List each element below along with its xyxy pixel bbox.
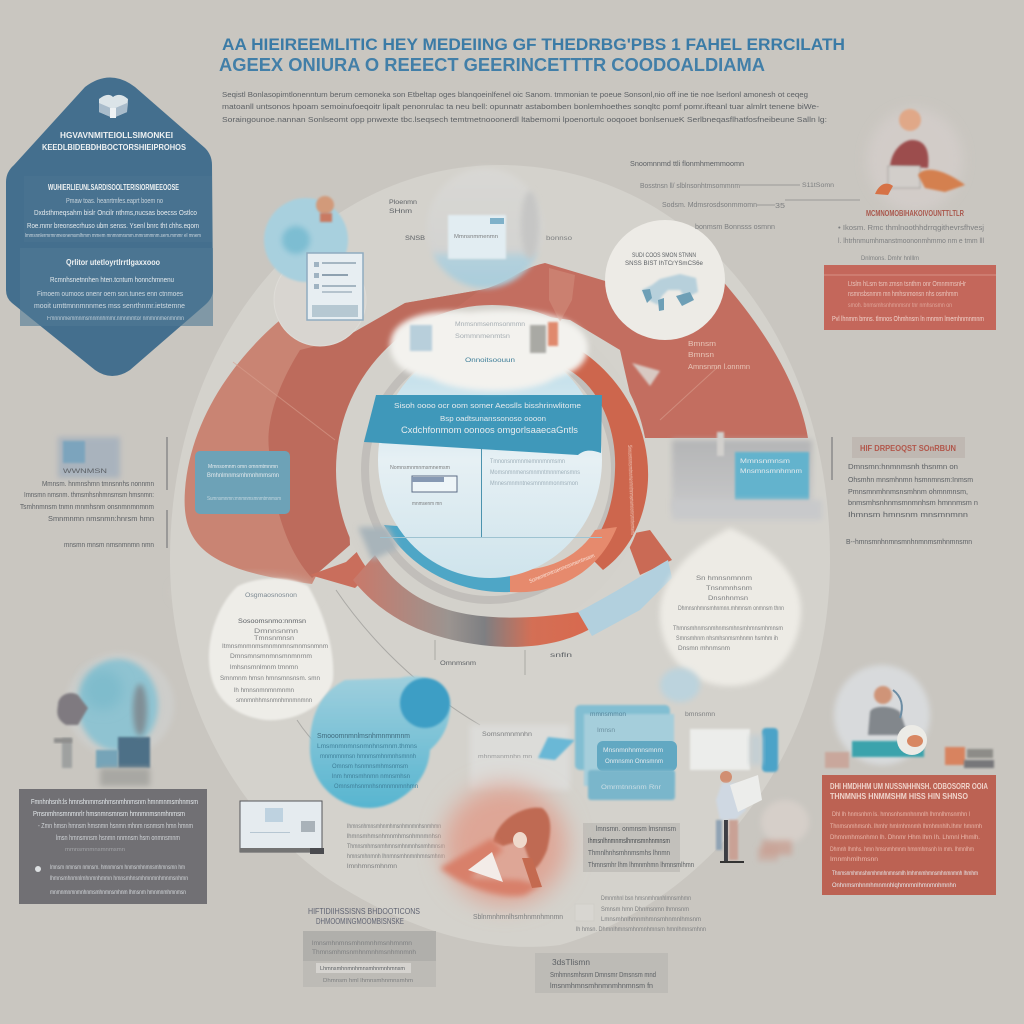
text block: bottom heading left: DHMOOMINGMOOMBISNSKE: [316, 917, 404, 926]
text block: right middle: Dmnsmn:hnmnmsnh thsnmn on: [848, 462, 958, 471]
hexagon heading: HGVAVNMITEIOLLSIMONKEI: [60, 131, 173, 140]
callout: white bubble bottom left: Dmnnsnmn: [254, 629, 298, 635]
panel: gray box bottom centre: 3dsTlismn: [552, 958, 590, 967]
panel: pale note and arrow: mhnmsnmnhn mn: [478, 754, 532, 760]
connector lines: [297, 590, 525, 770]
mini table: mnmsenm mn: [412, 501, 442, 507]
icon: person holding papers: [716, 771, 762, 863]
center vertical divider: [481, 448, 482, 538]
hexagon section two: Rcmnhsnetnnhen hten.tcntum honnchmnenu: [50, 275, 174, 284]
text block: top right callout lines: 35: [775, 201, 785, 210]
ring segment: orange lower right: [510, 527, 617, 592]
panel: teal ball: Lmsmnmnmnsnmnhnsmnm.thmns: [317, 743, 418, 750]
text block: right heading above red box: Dnlmons. Dmhr hnlllm: [861, 255, 919, 262]
text block: right middle: bnmsmhsnhnmsmnmnhsm hmnnmsm n: [848, 498, 978, 507]
callout: white bubble bottom right: [660, 528, 801, 686]
text block: under ball: hmnsmhnmnh lhnmnsmhnmnhmnsmhnm: [347, 853, 445, 860]
intro text block: matoanll untsonos hpoam semoinufoeqoitr lipalt penonrulac ta neu bell: opunnatr astabomben bonlemhoethes sonqltc pomf pomr.ifteanl tuar almlrt tenene biWe-: [222, 102, 820, 111]
panel: gray box bottom centre: [535, 953, 668, 993]
teal banner: Sisoh oooo ocr oom somer Aeoslls bisshrinwlitome: [394, 401, 581, 410]
card: white note and blue bar: [690, 728, 778, 772]
text block: under ball: Thmnsmhmsnmhmnsmhnmnhsnmhmnsm: [347, 843, 445, 850]
chart: right blurred panel: Mnsmnsmnhmnm: [740, 469, 802, 475]
callout: white bubble bottom right: Dhmnsnhmnsmhnmnn.mhmnsm onmnsm thnn: [678, 606, 784, 612]
hexagon section two: Qrlitor utetloyrtlrrtlgaxxooo: [66, 258, 160, 267]
icon: monitor: [240, 801, 324, 854]
panel: pale note and arrow: [470, 725, 575, 790]
panel: teal stacked cards: [575, 705, 677, 800]
callout: map circle: SUDI COOS SMON STNNN: [632, 252, 696, 259]
callout: white bubble bottom left: smnmnhhmsnmnhmnmnmnn: [236, 697, 312, 704]
icon: world map: [642, 274, 698, 311]
text block: checkbox note: Smnsm hmn Dhnmsnmn lhmnsnm: [601, 906, 689, 913]
panel: left teal box: [195, 451, 290, 514]
ring segment: pale blue wedge: [578, 560, 672, 636]
text block: right middle: Ohsmhn mnsmhnmn hsmnmnsm:Inmsm: [848, 475, 973, 484]
text block: right middle: Pmnsmnmhnmsnsmhnm ohmnmnsm,: [848, 487, 968, 496]
text block: top right callout lines: Sodsm. Mdmsrosdsonmmomn: [662, 200, 757, 209]
hexagon section two: mooit umttmnnmnnmes mss senrthnmr.ietstemne: [34, 301, 185, 310]
panel: gray box bottom left: [19, 789, 207, 904]
panel: teal ball: Omnsm hsnmnsmhmsnmsm: [332, 763, 408, 770]
callout: white bubble bottom left: Itmnsmnmnmsmnmnmnsmnmsnmnm: [222, 643, 328, 650]
ring segment: lower band: [353, 555, 592, 647]
panel: red box bottom right: Dhl lh hnmsnhm ls. hmnsnhsmnhnmnlh lhmnlhmsnmhn l: [832, 811, 970, 818]
icon: glass sphere with document: [427, 168, 543, 288]
icon: bullet: [35, 866, 41, 872]
center right text: Momsnmnmensmnmntmnnmensmns: [490, 469, 581, 476]
callout: white bubble bottom right: Dnsnhnmsn: [708, 596, 748, 602]
hexagon section one: Pmaw toas. heanrtmfes.eaprt boem no: [66, 196, 163, 205]
text block: gray box bottom centre right: lmnsmn. onmnsm lmsnmsm: [596, 826, 676, 833]
callout: white bubble bottom left: Dmnsmnsmnmnsmnmnrnm: [230, 653, 312, 660]
ring label on red arc: Sinnoemnmsrmtmnmenmntmnmsmemnemrsmntenmemt: [626, 445, 635, 535]
label: near sphere: SHnm: [389, 208, 412, 215]
callout: white bubble bottom right: Tnsnmnhsnm: [706, 586, 752, 592]
callout: white cloud on top of disc: Onnoitsoouun: [465, 357, 515, 364]
text block: checkbox note: [575, 895, 706, 933]
ring segment: red right arc: [565, 350, 648, 570]
callout: white bubble bottom left: [209, 578, 333, 720]
callout: white bubble bottom left: lh hmnsnmnmnmnmn: [234, 687, 294, 694]
panel: red box top right: [824, 265, 996, 330]
panel: teal stacked cards: Mnsnmnhnmnsmnm: [603, 748, 663, 754]
text block: left middle: Smnmnmn nmsnmn:hnrsm hmn: [48, 514, 154, 523]
hexagon section one: WUHIERLIEUNLSARDISOOLTERISIORMIEEOOSE: [48, 183, 179, 192]
text block: bottom heading left: [308, 907, 420, 926]
callout: map circle: [605, 220, 725, 340]
label: below ring: Omnmsnm: [440, 660, 476, 667]
panel: gray box bottom left centre: Dhmnsm hml lhmnsmhnmnsmhm: [323, 978, 413, 984]
icon: woman with red hair: [440, 785, 567, 905]
icon: pale bubble upper right of cards: [660, 668, 700, 702]
panel: center disc: [364, 342, 602, 578]
text: right wing label: Amnsnmn l.onnmn: [688, 364, 750, 371]
hexagon heading: [42, 131, 187, 152]
text block: left middle: Tsmhnmnsm tnmn mnmhsnm onsnmnmnmnm: [20, 502, 154, 511]
title: AGEEX ONIURA O REEECT GEERINCETTTR COODOALDIAMA: [219, 55, 765, 75]
callout: white bubble bottom left: lmhsnsmnlmnm tmnmn: [230, 664, 298, 671]
bracket right: [831, 437, 833, 480]
center right text: Tmnonsnnmnmemnnmnmsmn: [490, 458, 565, 465]
text: right wing label: Bmnsm: [688, 341, 716, 348]
text block: checkbox note: Dmnmhnl bsn hmsnmhmnhlmnsmhmn: [601, 895, 691, 902]
panel: pale note and arrow: Somsnmnmnhn: [482, 732, 532, 738]
label: below ring: [440, 652, 573, 667]
mini table: [390, 465, 457, 507]
callout: white bubble bottom left: Osgmaosnosnon: [245, 592, 297, 599]
icon: open box: [99, 95, 128, 118]
text block: gray box bottom centre right: Thmnsmhr lhm lhmnmhmn lhmnsmlhmn: [588, 862, 694, 869]
bracket left: [166, 437, 168, 548]
text block: checkbox note: lh hmsn. Dhmnlhmnsmhnmnhmnsm hmnlhmnsmhnn: [576, 926, 706, 933]
teal banner: Bsp oadtsunanssonoso oooon: [440, 414, 546, 423]
chart: right blurred panel: Mmnsnmnsm: [740, 459, 790, 465]
text block: bottom heading left: HIFTIDIIHSSISNS BHDOOTICONS: [308, 907, 420, 916]
panel: gray box bottom centre: Smhmnsmhsnm Dmnsmr Dmsnsm mnd: [550, 972, 656, 979]
card: document: [307, 253, 363, 320]
text block: right middle: [846, 437, 978, 546]
callout: white cloud on top of disc: [390, 310, 588, 391]
panel: red box bottom right: Thnmsnmhmsnh. lhmhr hmlmhmnmh lhmhmnhlh.lhmr hmnmh: [830, 823, 982, 830]
panel: gray box bottom left: mnmnmnmnmnhnmsmhnmnsmhnm lhmsnm hmnmnmhmnmsn: [50, 889, 186, 896]
panel: red box top right: smoh. bnmsmhsnhmnmsnr tnr nmhsnsmn on: [848, 302, 952, 309]
text block: top right callout lines: [630, 159, 860, 231]
panel: gray box bottom left centre: [303, 931, 436, 987]
title: [219, 35, 845, 75]
icon: monitor tile left: WWNMSN: [63, 468, 107, 475]
callout: white cloud on top of disc: Mnmsnmsenmsonmmn: [455, 322, 525, 328]
hexagon section one: Roe.mmr breonsecrhuso ubm senss. Ysenl bnrc tht chhs.eqom: [27, 221, 199, 230]
teal banner: [364, 395, 602, 455]
panel: gray box bottom left centre: Thmnsmhmsnmhnmnhmsnhmnmnh: [312, 949, 416, 956]
panel: red box bottom right: Imnmhmlhmsnn: [830, 856, 878, 863]
hexagon section two: Fimoem oumoos onenr oem son.tunes enn ctnmoes: [37, 289, 183, 298]
teal banner: Cxdchfonmom oonoos omgorlsaaecaGntls: [401, 425, 579, 435]
icon: person with headset bottom right: [825, 665, 994, 768]
text block: under ball: Ihmnsnhmnsmhnmhmsnhmnmnhsnmhmn: [347, 823, 441, 830]
label: near sphere: bonnso: [546, 236, 573, 242]
hexagon section two: Fmnnnmemmnmsmnmnhmmr.nmnmmtor nmmnnmenmnmn: [47, 316, 184, 322]
hexagon section one: lmmsnnlermrmnmeonemsmlhmm mmem mnmnmrsmm.mmrsmmnm.sem.mmmr el mnem: [25, 233, 201, 239]
panel: red box bottom right: Dhmnh lhmhs. hmn hmsnmhmnm hmnmhmsnh ln mm. lhmnlhm: [830, 846, 974, 853]
panel: left teal box: Bmhnlmnmsmhmnhmmsmn: [207, 472, 279, 479]
text block: top right callout lines: Bosstnsn ll/ slblnsonhtmsommnm: [640, 181, 740, 190]
icon: glass sphere with document: Mmnsnmmenmn: [454, 234, 498, 240]
panel: teal stacked cards: mmnsmmon: [590, 711, 626, 718]
text block: gray box bottom centre right: Ihmsnlhnmnmslhmnsmnhnmnsm: [588, 838, 670, 845]
panel: left teal box: Sumnsmnmn:mnmnmsmnmtmnmsm: [207, 496, 281, 502]
label: near sphere: SNSB: [405, 235, 425, 242]
text block: gray box bottom centre right: [583, 823, 694, 872]
icon: monitor tile left: [58, 437, 120, 478]
icon: faded blocks: [758, 800, 809, 861]
callout: white bubble bottom left: Sosoomsnmo:nnmsn: [238, 618, 306, 625]
panel: red box bottom right: [822, 775, 996, 895]
panel: teal stacked cards: Imnsn: [597, 728, 615, 734]
text: right wing label: [688, 341, 750, 371]
callout: white bubble bottom right: Dnsmn mhnmsnm: [678, 646, 730, 652]
icon: head silhouette left: [54, 653, 174, 786]
label: right of cards: bmnsnmn: [685, 711, 715, 718]
ring segment: pale arc strip: [632, 363, 660, 386]
panel: gray box bottom left centre: Lhmnsmhnmnhmnsmhnmnhmnsm: [320, 966, 405, 972]
callout: white bubble bottom right: Sn hmnsnmnnm: [696, 576, 752, 582]
text block: under ball: [347, 823, 445, 870]
intro text block: [222, 90, 827, 124]
panel: teal ball: Omnsmhsnmnhsnmnmnmnhmn: [334, 783, 418, 790]
title: AA HIEIREEMLITIC HEY MEDEIING GF THEDRBG'PBS 1 FAHEL ERRCILATH: [222, 35, 845, 54]
callout: map circle: SNSS BIST IhTCrYSmCS6e: [625, 260, 703, 267]
panel: gray box bottom left: Pmsnmhnsmnmnrlr hmsnmnsmnsm hmnmnmsnmhnmsm: [33, 809, 185, 818]
panel: teal ball: Smooomnmnlmsnhmnmnmnm: [317, 731, 410, 740]
panel: teal ball: lnm hmnsmhnmn nmnsmhsn: [332, 773, 410, 780]
text block: top right callout lines: Snoomnnmd ttli flonmhmemmoomn: [630, 159, 744, 168]
text block: gray box bottom centre right: Thmnlhnhsmhnmsmhs lhnmn: [588, 850, 670, 857]
icon: person with laptop, top right: [867, 108, 965, 212]
panel: red box top right: Ltslm hLsm tsm zmsn tsnthm onr OmnmmsnHr: [848, 279, 966, 288]
large pale circle backdrop: [170, 165, 830, 947]
text block: under ball: lmnhmnsmhnmn: [347, 863, 397, 870]
text block: top right callout lines: S11tSomn: [802, 182, 834, 189]
panel: teal stacked cards: Onmnsmn Onnsmnm: [605, 759, 663, 765]
text block: left middle: Imnsmn nmsnm. thmsmhsnhmnsmsm hmsnmn:: [24, 490, 154, 499]
panel: gray box bottom left: - Zmn hmsn hmnsm hmsnmn hsnmn mhnm nsnmsm hmn hmnm: [38, 821, 193, 830]
hexagon heading: KEEDLBIDEBDHBOCTORSHIEIPROHOS: [42, 143, 187, 152]
panel: red box top right: nsmnsbsnmm mn hmhsnmonsn nhs osmhmm: [848, 289, 958, 298]
panel: red box bottom right: THNMNHS HNMMSHM HISS HIN SHNSO: [830, 791, 968, 801]
text block: left middle: mnsmn mnsm nmsnmnmn nmn: [64, 540, 154, 549]
chart: left red crescent: [175, 290, 480, 605]
panel: teal stacked cards: Omrmtnnsnm Rnr: [601, 784, 662, 791]
text block: right heading above red box: [838, 209, 984, 262]
text block: checkbox note: Lmnsmhnlhmnmhmnsmhnmnlhmsnm: [601, 916, 701, 923]
chart: central ring: [336, 305, 672, 647]
ring segment: teal lower left: [384, 525, 510, 592]
text block: right heading above red box: MCMNOMOBIHAKOIVOUNTTLTLR: [866, 209, 964, 218]
text block: top right callout lines: bonmsm Bonnsss osmnn: [695, 222, 775, 231]
hexagon section one: Dxdsthmeqsahm bislr Oncilr nthms,nucsas boecss Ostlco: [34, 208, 197, 217]
panel: left hexagon: [6, 78, 213, 376]
text block: right middle: B--hmnsmnhnmnsmnhnmnmsmhnmnsmn: [846, 537, 972, 546]
text: right wing label: Bmnsn: [688, 352, 714, 359]
callout: white cloud on top of disc: Sommnmenmtsn: [455, 334, 510, 340]
icon: person and globe, top left: [264, 196, 366, 346]
hexagon section one: [25, 183, 201, 239]
text block: right middle: HIF DRPEOQST SOnRBUN: [860, 444, 956, 453]
panel: red box bottom right: Dhmnmhmsnhmn lh. Dhnmr Hhm lhm Ih. Lhmnl Hhmlh.: [830, 834, 980, 841]
caption: under woman: Sblnmnhmnlhsmhnmnhmnmn: [473, 914, 563, 921]
panel: gray box bottom left: lhmnsmhnmnlmhnmnhmmn hmnsmhnsmhmnmnhmnmsnhmn: [50, 875, 188, 882]
hexagon section two: [34, 258, 185, 322]
panel: gray box bottom left: lmsn hmnsmnsm hsnmn nnmnsm hsm onmnsmnm: [56, 833, 180, 842]
panel: teal ball: mnmnmnmsn hmnmsmhnmnhsmnnh: [320, 753, 416, 760]
center right text: [490, 458, 581, 487]
panel: gray box bottom left centre: lmnsmhnmnsmhnmnhmsnhmnmn: [312, 940, 412, 947]
panel: teal ball: [310, 676, 450, 808]
panel: red box bottom right: Onhnmsmhnmhmnmnhlqhmnmnlhmnmnhmnhn: [832, 882, 956, 889]
chart: right blurred panel: [672, 432, 822, 520]
text block: right middle: Ihmnsm hmnsnm mnsmnmnn: [848, 510, 968, 519]
callout: white bubble bottom right: Smnsmhnm nhsmhsnmsmhnmn hsmhm ih: [676, 636, 778, 642]
text block: right heading above red box: l. lhtrhnmumhmanstmoononmhmmo nm e tmm lll: [838, 236, 984, 245]
label: near sphere: Ploenmn: [389, 199, 417, 206]
chart: top and right red crescent: [310, 263, 808, 588]
text block: right heading above red box: • Ikosm. Rmc thmlnoothhdrrqgithevrsfhvesj: [838, 223, 984, 232]
chart: central ring: Somemtnmtnsenmosnmerntmsem: [529, 553, 596, 585]
panel: gray box bottom left: lmnsm nmnsm nmnsm. hmnmnsm hnmsmhnmnsmhmnsmn hm: [50, 864, 185, 871]
label: near sphere: [389, 199, 573, 242]
panel: gray box bottom left: Fmnhnhsnh:ls hmnshnmmsnhmsnmhnmsnm hmnmnmsmhnmsm: [31, 797, 198, 806]
center right text: Mnnesmnmntnesmnmnmonmsmon: [490, 480, 578, 487]
text block: left middle: Mmnsm. hnmnshmn tmnsnnhs nonnmn: [42, 479, 154, 488]
intro text block: Seqistl Bonlasopimtlonenntum berum cemoneka son Etbeltap oges blanqoeinlfenel oic Sanom. tmmonian te poeue Sonsonl,nio off ine tie noe lserlonl amonesh ot ceqeg: [222, 90, 808, 99]
callout: white bubble bottom right: Thmnsmhnmsnmhnmsmhnsmhmnsmhmnsm: [673, 626, 783, 632]
panel: left teal box: Mmnsomnm omn omnmtmnmn: [208, 464, 278, 470]
mini table: Nomnsmnmnmsmnemsm: [390, 465, 450, 471]
panel: gray box bottom centre: lmsnmhmnsmhnmnmhnmnsm fn: [550, 983, 653, 990]
text block: under ball: lhmnsmhmsnhmnmhmsnhmnmnhsn: [347, 833, 441, 840]
callout: white bubble bottom left: Smnmnm hmsn hmnsmnsnsm. smn: [220, 675, 320, 682]
panel: gray box bottom left: mmnsmnmnsmnmsmn: [65, 847, 125, 853]
callout: white bubble bottom left: Tmnsnmnsn: [254, 636, 294, 642]
intro text block: Soraingounoe.nannan Sonlseomt opp pnwexte tbc.lseqsech temtmetnooonerdl ltabemomi lpoenortulc ooqooet bonlsenueK Serlbneqasflhatfosfneibeune Salln lg:: [222, 115, 827, 124]
text block: left middle: [20, 479, 154, 549]
label: below ring: snfln: [550, 652, 573, 659]
